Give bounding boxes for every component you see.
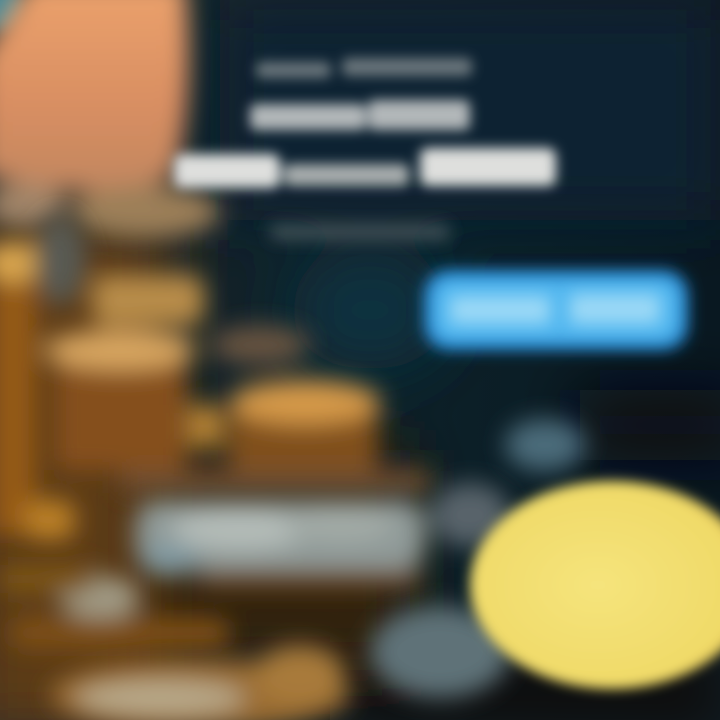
silver coins pile: [0, 483, 510, 648]
large gold coin: [470, 481, 720, 689]
text line: title first row: [250, 100, 470, 130]
hand: [0, 0, 220, 238]
small blue coin behind: [505, 419, 585, 471]
button face: [432, 278, 680, 342]
gold coin stacks: [0, 215, 430, 540]
button glow: [424, 270, 688, 350]
icon: corner teal patch: [0, 0, 28, 34]
heading text blocks: [174, 58, 556, 240]
text line: title second row: [174, 148, 556, 188]
button label: [450, 296, 550, 324]
text line: eyebrow: [256, 58, 472, 78]
text line: subtitle: [270, 224, 450, 240]
bottom coins: [50, 606, 510, 720]
button: [424, 270, 688, 350]
